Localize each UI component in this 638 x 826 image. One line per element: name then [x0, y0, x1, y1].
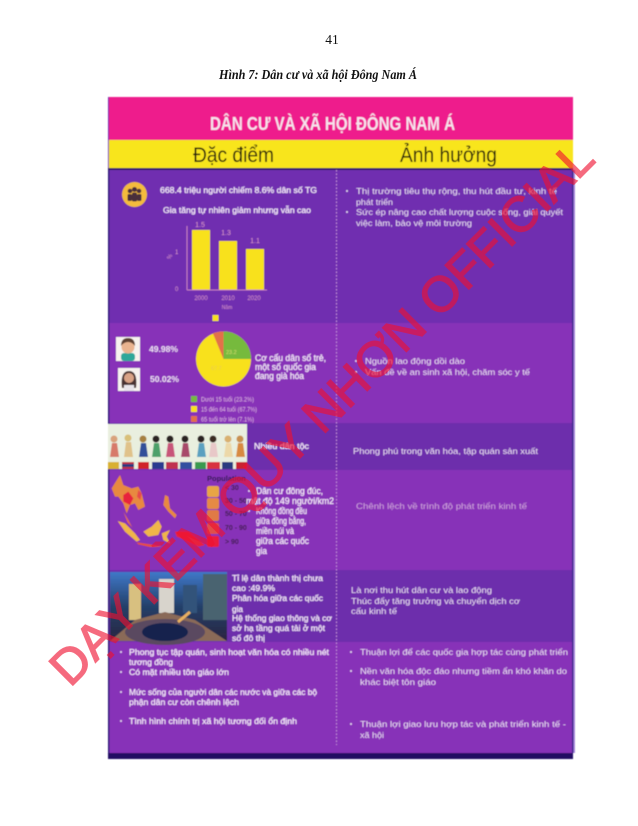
- urbanization text: [232, 573, 333, 643]
- population density text: giữa các quốc: [256, 536, 309, 546]
- bar chart: Năm: [222, 305, 232, 311]
- icon: boy: [116, 337, 140, 361]
- society bullet list: tương đồng: [129, 657, 173, 667]
- population density text: giữa đồng bằng,: [256, 516, 306, 526]
- effects: society: xã hội: [360, 730, 384, 740]
- icon: girl: [118, 368, 140, 391]
- population density text: gia: [256, 546, 267, 556]
- effects: population: Thị trường tiêu thụ rộng, thu hút đầu tư, kinh tế: [356, 186, 557, 196]
- urbanization text: sở hạ tầng quá tải ở một: [232, 623, 326, 633]
- page number: 41: [325, 32, 339, 47]
- society bullet list: [120, 647, 330, 726]
- effects: urbanization: Thúc đẩy tăng trưởng và chuyển dịch cơ: [351, 596, 520, 606]
- effects: age structure: [355, 356, 530, 377]
- urbanization text: cao :49.9%: [232, 583, 276, 593]
- pie legend: Dưới 15 tuổi (23.2%): [201, 396, 254, 404]
- age structure text: một số quốc gia: [255, 362, 316, 372]
- population text: 668.4 triệu người chiếm 8.6% dân số TG: [160, 185, 317, 195]
- bar chart: 2000: [194, 296, 208, 302]
- pie legend: 65 tuổi trở lên (7.1%): [201, 416, 254, 424]
- illustration: ethnic groups and flags: [108, 424, 247, 469]
- text: ethnic groups: Nhiều dân tộc: [254, 441, 309, 451]
- effects: population: việc làm, bảo vệ môi trường: [356, 218, 472, 228]
- watermark: DẠY KÈM QUY NHƠN OFFICIAL: [40, 131, 605, 696]
- effects: society: Nền văn hóa độc đáo nhưng tiềm ẩn khó khăn do: [360, 666, 567, 676]
- effects: urbanization: cấu kinh tế: [351, 606, 397, 616]
- title banner: [109, 97, 573, 140]
- effects: urbanization: [351, 585, 520, 616]
- title banner: DÂN CƯ VÀ XÃ HỘI ĐÔNG NAM Á: [210, 113, 455, 134]
- population density text: Không đồng đều: [256, 506, 307, 516]
- effects: population: phát triển: [356, 197, 393, 207]
- population text: [160, 185, 317, 215]
- population density text: Dân cư đông đúc,: [256, 486, 323, 496]
- row bands: [108, 170, 575, 759]
- bar chart: 1.5: [195, 222, 205, 229]
- bar chart: 1: [175, 250, 179, 256]
- society bullet list: Mức sống của người dân các nước và giữa các bộ: [129, 687, 317, 697]
- infographic: [108, 97, 575, 759]
- column headers: [108, 140, 573, 170]
- urbanization text: Tỉ lệ dân thành thị chưa: [232, 573, 323, 583]
- society bullet list: Tình hình chính trị xã hội tương đối ổn định: [129, 716, 297, 726]
- map: Southeast Asia: [112, 475, 205, 547]
- population density text: mật độ 149 người/km2: [246, 496, 334, 506]
- urbanization text: số đô thị: [232, 633, 265, 643]
- gender share: female: 50.02%: [150, 374, 179, 384]
- map legend: 30 - 50: [225, 498, 247, 505]
- pie legend: [191, 396, 257, 424]
- pie chart: [196, 332, 251, 386]
- map legend: 70 - 90: [225, 525, 247, 532]
- bar chart: 1.3: [221, 230, 231, 237]
- map legend: Population: [207, 474, 246, 483]
- bar chart: 1.1: [250, 238, 260, 245]
- pie chart: 67.7: [211, 366, 222, 372]
- effects: society: Thuận lợi để các quốc gia hợp tác cùng phát triển: [360, 647, 568, 657]
- column headers: Đặc điểm: [193, 144, 274, 167]
- effects: urbanization: Là nơi thu hút dân cư và lao động: [351, 585, 492, 595]
- gender share: male: 49.98%: [149, 344, 178, 354]
- bar chart: 2010: [221, 296, 235, 302]
- effects: density: Chênh lệch về trình độ phát triển kinh tế: [356, 501, 527, 511]
- urbanization text: gia: [232, 604, 243, 614]
- age structure text: đang già hóa: [255, 371, 304, 381]
- bar chart: 2020: [247, 296, 261, 302]
- effects: society: Thuận lợi giao lưu hợp tác và phát triển kinh tế -: [360, 719, 566, 729]
- map legend: [207, 474, 247, 547]
- figure caption: Hình 7: Dân cư và xã hội Đông Nam Á: [218, 67, 417, 82]
- pie chart: 23.2: [226, 350, 237, 356]
- bar chart: %: [167, 253, 175, 261]
- population density text: [246, 486, 334, 556]
- icon: people: [122, 182, 147, 207]
- effects: age structure: Nguồn lao động dồi dào: [365, 356, 465, 366]
- effects: ethnic groups: Phong phú trong văn hóa, tập quán sản xuất: [353, 446, 539, 456]
- map legend: < 30: [225, 485, 239, 492]
- effects: population: [346, 186, 564, 228]
- effects: society: khác biệt tôn giáo: [360, 677, 436, 687]
- bar chart: [167, 222, 267, 321]
- urbanization text: Phân hóa giữa các quốc: [232, 593, 323, 603]
- society bullet list: Có mặt nhiều tôn giáo lớn: [129, 667, 229, 677]
- age structure text: [255, 353, 326, 381]
- map legend: > 90: [225, 539, 239, 546]
- urbanization text: Hệ thống giao thông và cơ: [232, 613, 333, 623]
- photo: city roundabout: [110, 572, 227, 645]
- map legend: 50 - 70: [225, 511, 247, 518]
- society bullet list: phận dân cư còn chênh lệch: [129, 697, 239, 707]
- society bullet list: Phong tục tập quán, sinh hoạt văn hóa có nhiều nét: [129, 647, 330, 657]
- column headers: Ảnh hưởng: [400, 144, 497, 167]
- pie legend: 15 đến 64 tuổi (67.7%): [201, 406, 257, 414]
- population text: Gia tăng tự nhiên giảm nhưng vẫn cao: [163, 205, 311, 215]
- effects: population: Sức ép nâng cao chất lượng cuộc sống, giải quyết: [356, 207, 564, 217]
- effects: society: [350, 647, 568, 740]
- age structure text: Cơ cấu dân số trẻ,: [255, 353, 326, 363]
- population density text: miền núi và: [256, 526, 294, 536]
- bar chart: 0: [175, 287, 179, 293]
- infographic background: [108, 97, 573, 759]
- effects: age structure: Vấn đề về an sinh xã hội, chăm sóc y tế: [365, 367, 530, 377]
